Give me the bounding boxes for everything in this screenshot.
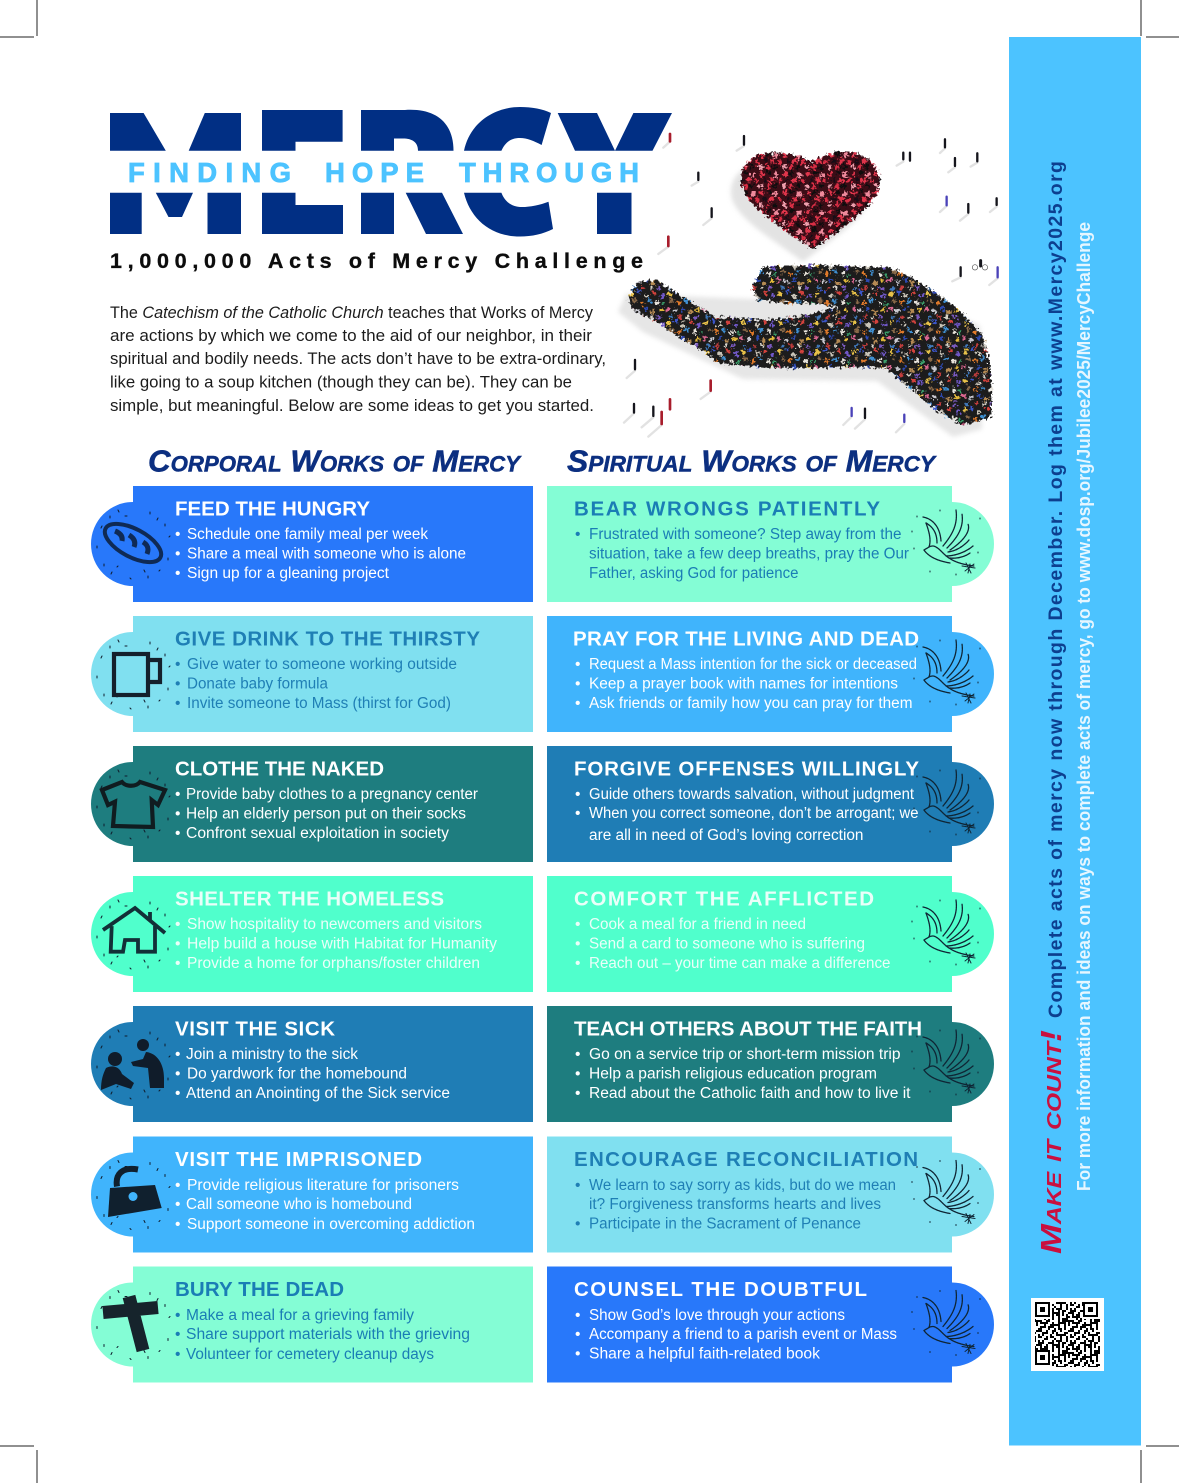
bullet list: [175, 656, 457, 712]
panel: encourage reconciliation: [547, 1136, 994, 1252]
bullet list: [575, 786, 918, 844]
panel: bury the dead: [91, 1266, 533, 1382]
bullet list: [175, 1046, 450, 1102]
heading: BEAR WRONGS PATIENTLY: [574, 498, 880, 520]
icon: dove: [912, 900, 980, 965]
panel: shelter the homeless: [91, 876, 533, 992]
heading: VISIT THE IMPRISONED: [175, 1148, 422, 1171]
bullet list: •: [575, 1216, 580, 1232]
heading: corporal works: Corporal Works of Mercy: [148, 444, 522, 478]
bullet list: Father, asking God for patience: [589, 565, 798, 582]
bullet list: •: [575, 936, 580, 952]
bullet list: Send a card to someone who is suffering: [589, 936, 865, 952]
bullet list: •: [175, 695, 180, 712]
panel: bear wrongs patiently: [547, 486, 994, 602]
bullet list: •: [175, 526, 180, 543]
bullet list: it? Forgiveness transforms hearts and lives: [589, 1196, 881, 1213]
sidebar call to action: make it count: Make it count!: [1036, 1030, 1068, 1254]
title: finding hope through: [128, 157, 639, 188]
icon: dove: [912, 1290, 980, 1356]
panel: visit the imprisoned: [91, 1136, 533, 1252]
icon: shirt: [97, 770, 170, 839]
bullet list: •: [575, 1066, 580, 1082]
intro text block: spiritual and bodily needs. The acts don’t have to be extra-ordinary,: [110, 350, 606, 368]
bullet list: Ask friends or family how you can pray for them: [589, 695, 912, 712]
bullet list: Schedule one family meal per week: [187, 526, 428, 543]
bullet list: [175, 1307, 470, 1363]
illustration: crowd forming heart and hand: [618, 134, 998, 437]
heading: COMFORT THE AFFLICTED: [574, 888, 874, 910]
subtitle: 1,000,000 Acts of Mercy Challenge: [110, 249, 643, 273]
icon: dove: [912, 510, 980, 575]
sidebar line: more information: For more information and ideas on ways to complete acts of mercy, go to www.dosp.org/Jubilee2025/MercyChallenge: [1073, 222, 1094, 1191]
icon: dove: [912, 640, 980, 705]
heading: BURY THE DEAD: [175, 1278, 344, 1301]
panel: comfort the afflicted: [547, 876, 994, 992]
bullet list: are all in need of God’s loving correction: [589, 827, 864, 844]
bullet list: [175, 526, 466, 582]
intro text block: simple, but meaningful. Below are some ideas to get you started.: [110, 397, 594, 415]
heading: FORGIVE OFFENSES WILLINGLY: [574, 758, 919, 780]
bullet list: •: [175, 1326, 180, 1343]
bullet list: Share support materials with the grieving: [186, 1326, 470, 1343]
title: MERCY word art: [110, 107, 672, 236]
heading: FEED THE HUNGRY: [175, 498, 370, 520]
bullet list: [175, 1177, 475, 1233]
heading: PRAY FOR THE LIVING AND DEAD: [573, 628, 919, 650]
bullet list: •: [575, 916, 580, 933]
heading: TEACH OTHERS ABOUT THE FAITH: [574, 1018, 922, 1040]
bullet list: •: [175, 546, 180, 562]
icon: house: [97, 900, 170, 969]
icon: mug: [97, 640, 170, 709]
heading: CLOTHE THE NAKED: [175, 758, 384, 780]
panel: clothe the naked: [91, 746, 533, 862]
heading: SHELTER THE HOMELESS: [175, 888, 444, 910]
bullet list: [575, 916, 890, 972]
bullet list: •: [175, 1085, 180, 1102]
heading: COUNSEL THE DOUBTFUL: [574, 1278, 867, 1301]
bullet list: •: [575, 1346, 580, 1362]
panel: forgive offenses willingly: [547, 746, 994, 862]
panel: feed the hungry: [91, 486, 533, 602]
bullet list: •: [175, 1346, 180, 1363]
heading: spiritual works: Spiritual Works of Mercy: [567, 444, 937, 478]
panel: teach others about the faith: [547, 1006, 994, 1122]
bullet list: Help an elderly person put on their socks: [186, 806, 466, 822]
title: finding hope through: FINDING: [128, 157, 291, 188]
bullet list: Read about the Catholic faith and how to live it: [589, 1085, 911, 1102]
bullet list: [175, 786, 478, 842]
bullet list: Provide baby clothes to a pregnancy center: [186, 786, 478, 803]
bullet list: •: [175, 786, 180, 803]
bullet list: Request a Mass intention for the sick or deceased: [589, 656, 917, 673]
bullet list: [175, 916, 497, 972]
title: finding hope through: HOPE: [325, 157, 424, 188]
bullet list: •: [175, 806, 180, 822]
bullet list: •: [175, 1177, 180, 1194]
bullet list: •: [575, 1177, 580, 1194]
icon: cross: [97, 1290, 170, 1360]
intro text block: [110, 304, 606, 415]
icon: bread: [97, 510, 170, 579]
bullet list: Call someone who is homebound: [186, 1196, 412, 1213]
bullet list: •: [575, 1326, 580, 1343]
bullet list: •: [575, 805, 580, 822]
icon: dove: [912, 770, 980, 835]
icon: open padlock: [97, 1160, 170, 1230]
bullet list: Keep a prayer book with names for intentions: [589, 676, 898, 692]
bullet list: •: [175, 565, 180, 582]
intro text block: The Catechism of the Catholic Church teaches that Works of Mercy: [110, 304, 594, 322]
bullet list: Frustrated with someone? Step away from the: [589, 526, 902, 543]
bullet list: Support someone in overcoming addiction: [187, 1216, 475, 1233]
bullet list: Invite someone to Mass (thirst for God): [187, 695, 451, 712]
heading: VISIT THE SICK: [175, 1018, 335, 1040]
title: finding hope through: THROUGH: [459, 157, 639, 188]
scattered people: [624, 134, 998, 437]
bullet list: [575, 1177, 896, 1232]
bullet list: situation, take a few deep breaths, pray the Our: [589, 546, 909, 562]
bullet list: •: [175, 825, 180, 842]
sidebar line: log acts of mercy: Complete acts of mercy now through December. Log them at www.Mercy2025.org: [1045, 161, 1067, 1018]
heading: ENCOURAGE RECONCILIATION: [574, 1148, 918, 1171]
panel: pray for the living and dead: [547, 616, 994, 732]
bullet list: Do yardwork for the homebound: [187, 1066, 407, 1082]
bullet list: •: [175, 1196, 180, 1213]
bullet list: Donate baby formula: [187, 676, 328, 692]
bullet list: Provide religious literature for prisoners: [187, 1177, 459, 1194]
panel: visit the sick: [91, 1006, 533, 1122]
bullet list: •: [175, 1066, 180, 1082]
bullet list: Participate in the Sacrament of Penance: [589, 1216, 861, 1232]
bullet list: •: [575, 1307, 580, 1324]
bullet list: Join a ministry to the sick: [186, 1046, 358, 1063]
bullet list: •: [575, 786, 580, 803]
panel: give drink to the thirsty: [91, 616, 533, 732]
bullet list: Show hospitality to newcomers and visitors: [187, 916, 482, 933]
icon: dove: [912, 1160, 980, 1226]
bullet list: When you correct someone, don’t be arrogant; we: [589, 805, 918, 822]
bullet list: •: [575, 676, 580, 692]
bullet list: Give water to someone working outside: [187, 656, 457, 673]
bullet list: Provide a home for orphans/foster children: [187, 955, 480, 972]
bullet list: •: [175, 1046, 180, 1063]
bullet list: Share a meal with someone who is alone: [187, 546, 466, 562]
bullet list: [575, 526, 909, 582]
icon: dove: [912, 1030, 980, 1095]
hand of people: [628, 265, 992, 425]
bullet list: Make a meal for a grieving family: [186, 1307, 414, 1324]
bullet list: Attend an Anointing of the Sick service: [186, 1085, 450, 1102]
bullet list: Confront sexual exploitation in society: [186, 825, 449, 842]
bullet list: Help a parish religious education program: [589, 1066, 877, 1082]
bullet list: Show God’s love through your actions: [589, 1307, 845, 1324]
bullet list: •: [575, 656, 580, 673]
bullet list: •: [575, 526, 580, 543]
bullet list: [575, 1046, 911, 1102]
bullet list: Cook a meal for a friend in need: [589, 916, 806, 933]
heart of people: [741, 152, 880, 250]
bullet list: •: [175, 955, 180, 972]
QR code: [1031, 1298, 1104, 1371]
bullet list: •: [575, 955, 580, 972]
bullet list: We learn to say sorry as kids, but do we mean: [589, 1177, 896, 1194]
bullet list: •: [575, 695, 580, 712]
bullet list: Volunteer for cemetery cleanup days: [186, 1346, 434, 1363]
bullet list: •: [575, 1046, 580, 1063]
bullet list: •: [575, 1085, 580, 1102]
bullet list: •: [175, 936, 180, 952]
icon: helping figures: [97, 1030, 170, 1099]
bullet list: [575, 656, 917, 712]
bullet list: Accompany a friend to a parish event or Mass: [589, 1326, 897, 1343]
sidebar panel: [1009, 37, 1141, 1446]
intro text block: are actions by which we come to the aid of our neighbor, in their: [110, 327, 593, 345]
bullet list: •: [175, 1216, 180, 1233]
bullet list: •: [175, 1307, 180, 1324]
bullet list: Guide others towards salvation, without judgment: [589, 786, 915, 803]
bullet list: Sign up for a gleaning project: [187, 565, 390, 582]
bullet list: Help build a house with Habitat for Humanity: [187, 936, 497, 952]
bullet list: Go on a service trip or short-term mission trip: [589, 1046, 900, 1063]
bullet list: Share a helpful faith-related book: [589, 1346, 820, 1362]
bullet list: Reach out – your time can make a difference: [589, 955, 890, 972]
bullet list: •: [175, 916, 180, 933]
intro text block: like going to a soup kitchen (though they can be). They can be: [110, 374, 572, 392]
heading: GIVE DRINK TO THE THIRSTY: [175, 628, 480, 650]
bullet list: •: [175, 676, 180, 692]
panel: counsel the doubtful: [547, 1266, 994, 1382]
bullet list: •: [175, 656, 180, 673]
bullet list: [575, 1307, 897, 1362]
